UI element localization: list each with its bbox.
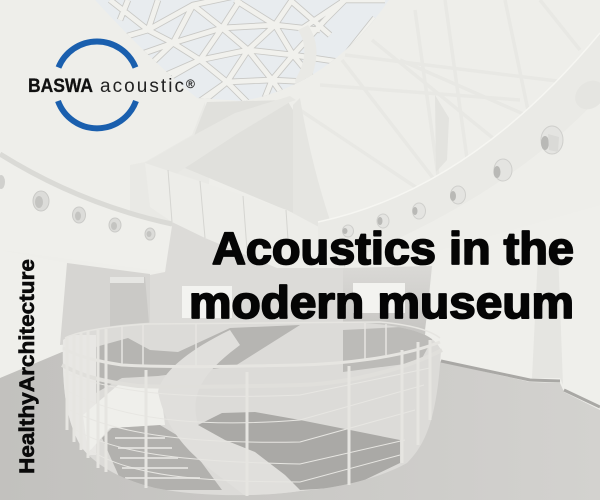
logo wordmark bold: BASWA	[28, 75, 93, 97]
title	[189, 223, 574, 328]
lower stair ribbon with panel joints	[145, 163, 345, 268]
railing	[62, 322, 442, 496]
pale band left of fence	[62, 335, 96, 455]
lower left wall	[0, 250, 67, 378]
back rail	[65, 322, 440, 338]
bolt 2	[33, 191, 49, 211]
right recess	[343, 266, 432, 335]
vertical label: HealthyArchitecture	[16, 259, 39, 474]
fine cables	[64, 368, 430, 482]
title line 2: modern museum	[189, 277, 574, 328]
bolt 11	[342, 225, 354, 237]
pale zone left of tower	[130, 102, 210, 240]
ring boss	[569, 75, 600, 115]
bolt 3	[72, 207, 86, 223]
floor	[0, 335, 600, 500]
bolt 9	[412, 203, 426, 219]
bolt 6	[541, 126, 563, 154]
skylight with lattice	[108, 0, 385, 101]
registered mark: ®	[186, 77, 195, 91]
lower rail	[62, 350, 442, 387]
thin upper posts	[122, 323, 386, 366]
bolt 1	[0, 175, 5, 189]
logo bottom arc	[58, 101, 136, 128]
logo: BASWA acoustic	[28, 41, 195, 128]
concrete lower wall	[150, 222, 345, 340]
lower stair treads	[102, 425, 222, 490]
lit openings in concrete	[182, 283, 405, 318]
bolt 5	[145, 228, 155, 240]
upper left ring band	[0, 156, 172, 272]
stair well interior	[55, 318, 445, 500]
lower right wall	[425, 205, 600, 408]
lit landing	[96, 385, 165, 444]
logo wordmark light: acoustic	[100, 76, 184, 97]
shadow lattice on upper right wall	[300, 0, 590, 200]
concrete tower	[185, 100, 293, 213]
bolt 10	[377, 214, 389, 228]
middle rail	[63, 342, 440, 367]
spiral sweep band	[158, 330, 240, 462]
right dark recess behind rail	[343, 327, 432, 372]
upper stair ribbon	[145, 96, 296, 178]
logo top arc	[58, 41, 136, 68]
doorway alcove	[60, 263, 150, 345]
bolt 7	[494, 159, 512, 181]
bolt 8	[450, 186, 466, 204]
title line 1: Acoustics in the	[212, 223, 574, 274]
ring bolts: right	[342, 126, 563, 237]
wedge beside tower	[293, 98, 335, 235]
bolt 4	[109, 218, 121, 232]
ring bolts: left	[0, 175, 155, 240]
fence posts	[67, 329, 430, 496]
lower dark floor	[198, 412, 400, 490]
upper right ring band	[318, 33, 600, 262]
back dark floor	[96, 325, 300, 393]
